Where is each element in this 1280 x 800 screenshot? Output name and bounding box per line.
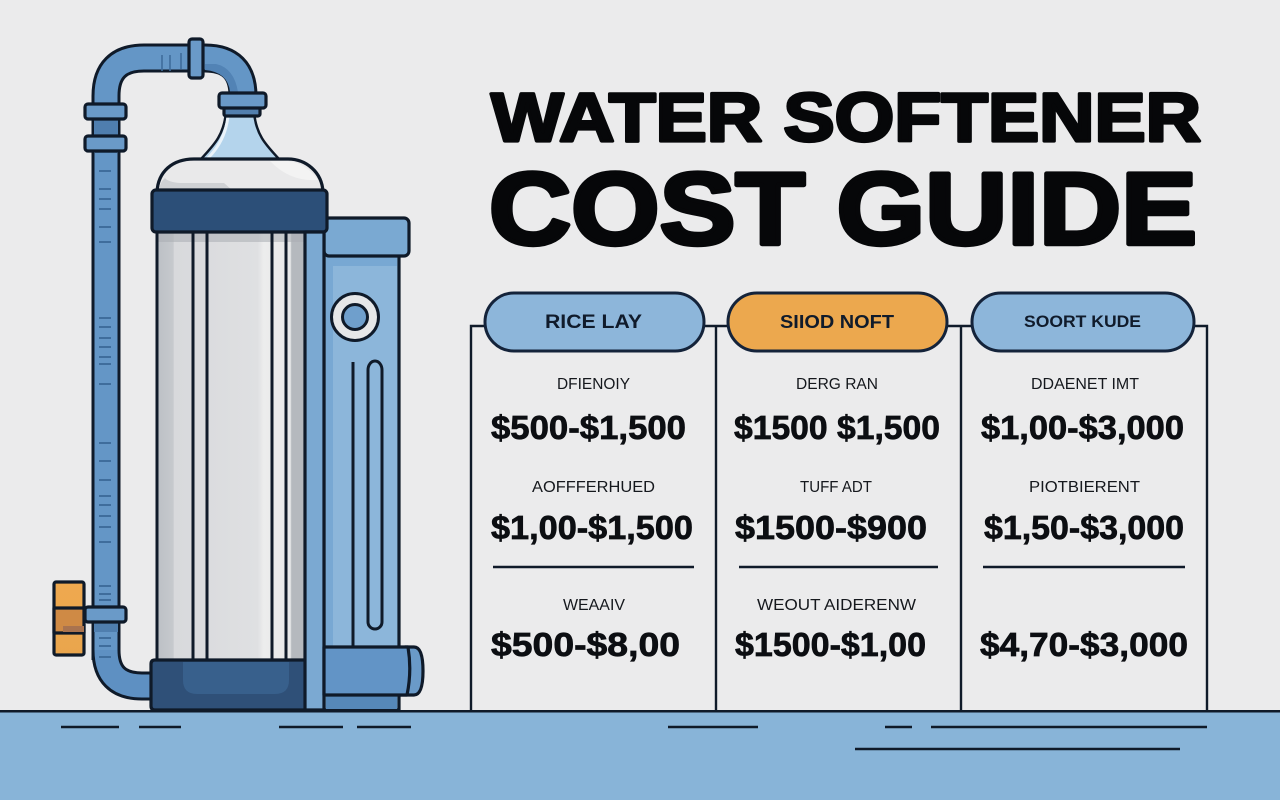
column one header pill: RICE LAY <box>545 312 642 333</box>
column one row one: $500-$1,500 <box>491 409 686 446</box>
icon: control box slot <box>353 361 382 648</box>
column three header pill: SOORT KUDE <box>1024 312 1141 331</box>
column three row two: PIOTBIERENT <box>1029 479 1140 496</box>
icon: softener control box <box>324 218 409 710</box>
column two row two <box>735 479 927 546</box>
column three row one: DDAENET IMT <box>1031 376 1139 393</box>
column two row one: DERG RAN <box>796 376 878 393</box>
column two row two: $1500-$900 <box>735 509 927 546</box>
column three row one <box>981 376 1184 446</box>
column three row two <box>984 479 1184 546</box>
column one row two: $1,00-$1,500 <box>491 509 693 546</box>
column one row three: WEAAIV <box>563 597 625 614</box>
icon: tank base <box>151 660 306 710</box>
column one row one <box>491 376 686 446</box>
heading line two: COST GUIDE <box>489 152 1197 266</box>
heading line one: WATER SOFTENER <box>491 79 1201 156</box>
icon: orange valve <box>54 582 84 655</box>
column two header pill: SIIOD NOFT <box>780 312 894 332</box>
column three row one: $1,00-$3,000 <box>981 409 1184 446</box>
column two row two: TUFF ADT <box>800 479 872 496</box>
column three row two: $1,50-$3,000 <box>984 509 1184 546</box>
column one header pill <box>485 293 704 351</box>
panel: column three <box>972 293 1194 663</box>
icon: tank dome <box>157 159 323 192</box>
panel: column one <box>485 293 704 663</box>
icon: outlet pipe <box>324 647 423 695</box>
icon: blue side strip <box>305 232 324 710</box>
column three header pill <box>972 293 1194 351</box>
column two row three <box>735 597 926 663</box>
column two row three: WEOUT AIDERENW <box>757 597 917 614</box>
panel: column two <box>728 293 947 663</box>
icon: pipe clamps <box>85 104 126 622</box>
column one row two <box>491 479 693 546</box>
icon: gauge dial <box>332 294 378 340</box>
icon: tank collar <box>152 190 327 232</box>
column one row three: $500-$8,00 <box>491 626 680 663</box>
column one row two: AOFFFERHUED <box>532 479 655 496</box>
floor band <box>0 710 1280 800</box>
column three row three: $4,70-$3,000 <box>980 626 1188 663</box>
icon: main inlet pipe <box>94 53 243 686</box>
column two row three: $1500-$1,00 <box>735 626 926 663</box>
column two header pill <box>728 293 947 351</box>
column two row one: $1500 $1,500 <box>734 409 940 446</box>
column one row three <box>491 597 680 663</box>
column one row one: DFIENOIY <box>557 376 630 393</box>
icon: top pipe flange <box>189 39 203 78</box>
water softener illustration <box>54 39 423 710</box>
title <box>489 79 1201 266</box>
table grid lines <box>471 326 1207 710</box>
column two row one <box>734 376 940 446</box>
icon: softener tank body <box>151 159 327 710</box>
icon: tank neck <box>201 93 279 159</box>
cost table <box>471 293 1207 710</box>
